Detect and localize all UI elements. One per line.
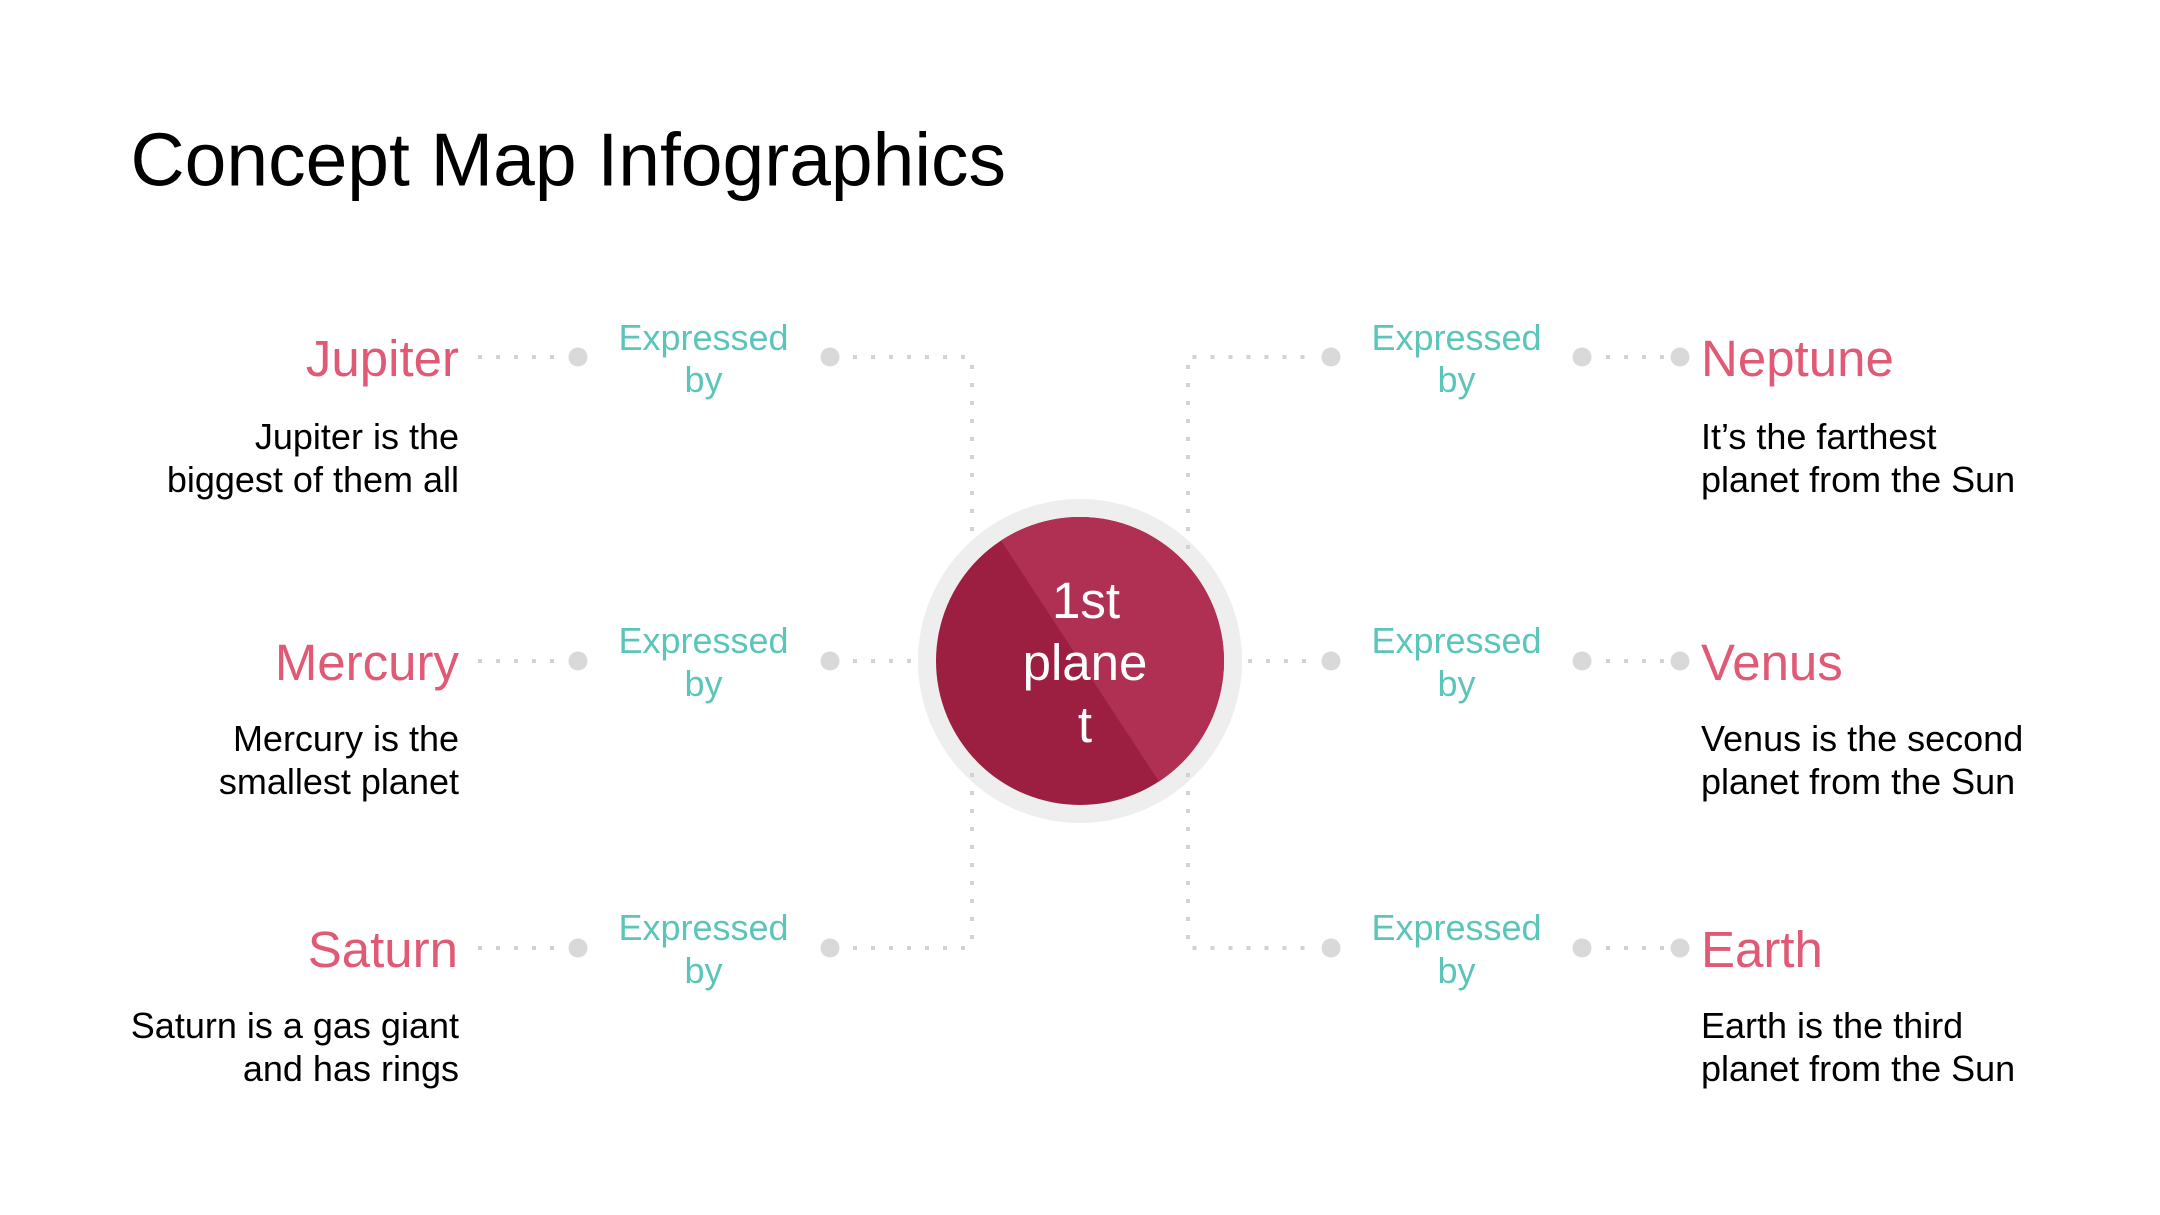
item: Saturn: and has rings [243,1048,459,1089]
item: Earth [1701,921,2015,1089]
item: Jupiter: Jupiter is the [255,416,459,457]
item: Mercury [219,634,459,802]
item: Mercury: Mercury is the [233,718,459,759]
center circle [936,517,1224,805]
item: Earth: Earth is the third [1701,1005,1963,1046]
item: Saturn [131,921,459,1089]
item: Venus: Venus is the second [1701,718,2023,759]
item: Earth: planet from the Sun [1701,1048,2015,1089]
label: expressed by, right top: Expressed [1371,317,1542,358]
item: Jupiter: Jupiter [306,330,459,387]
item: Venus: planet from the Sun [1701,761,2015,802]
item: Saturn: Saturn is a gas giant [131,1005,459,1046]
label: expressed by, left middle: by [684,663,723,704]
item: Venus [1701,634,2023,802]
connector: left column dotted lines [478,357,972,948]
label: expressed by, right bottom: Expressed [1371,907,1542,948]
center label: t [1078,696,1092,753]
item: Neptune: It’s the farthest [1701,416,1936,457]
item: Jupiter [167,330,459,500]
item: Saturn: Saturn [308,921,458,978]
item: Earth: Earth [1701,921,1823,978]
item: Neptune [1701,330,2015,500]
center label: plane [1023,634,1147,691]
item: Mercury: smallest planet [219,761,459,802]
label: expressed by, left top: by [684,359,723,400]
center ring [918,499,1242,823]
item: Neptune: planet from the Sun [1701,459,2015,500]
label: expressed by, left bottom: Expressed [618,907,789,948]
label: expressed by, left top: Expressed [618,317,789,358]
center label: 1st [1052,572,1120,629]
label: expressed by, left bottom: by [684,950,723,991]
item: Venus: Venus [1701,634,1843,691]
item: Jupiter: biggest of them all [167,459,459,500]
label: expressed by, right middle: Expressed [1371,620,1542,661]
node dots [568,348,1690,958]
label: expressed by, right middle: by [1437,663,1476,704]
label: expressed by, right bottom: by [1437,950,1476,991]
item: Mercury: Mercury [275,634,459,691]
title: Concept Map Infographics [130,118,1006,202]
label: expressed by, right top: by [1437,359,1476,400]
label: expressed by, left middle: Expressed [618,620,789,661]
connector: right column dotted lines [1188,357,1664,948]
item: Neptune: Neptune [1701,330,1894,387]
